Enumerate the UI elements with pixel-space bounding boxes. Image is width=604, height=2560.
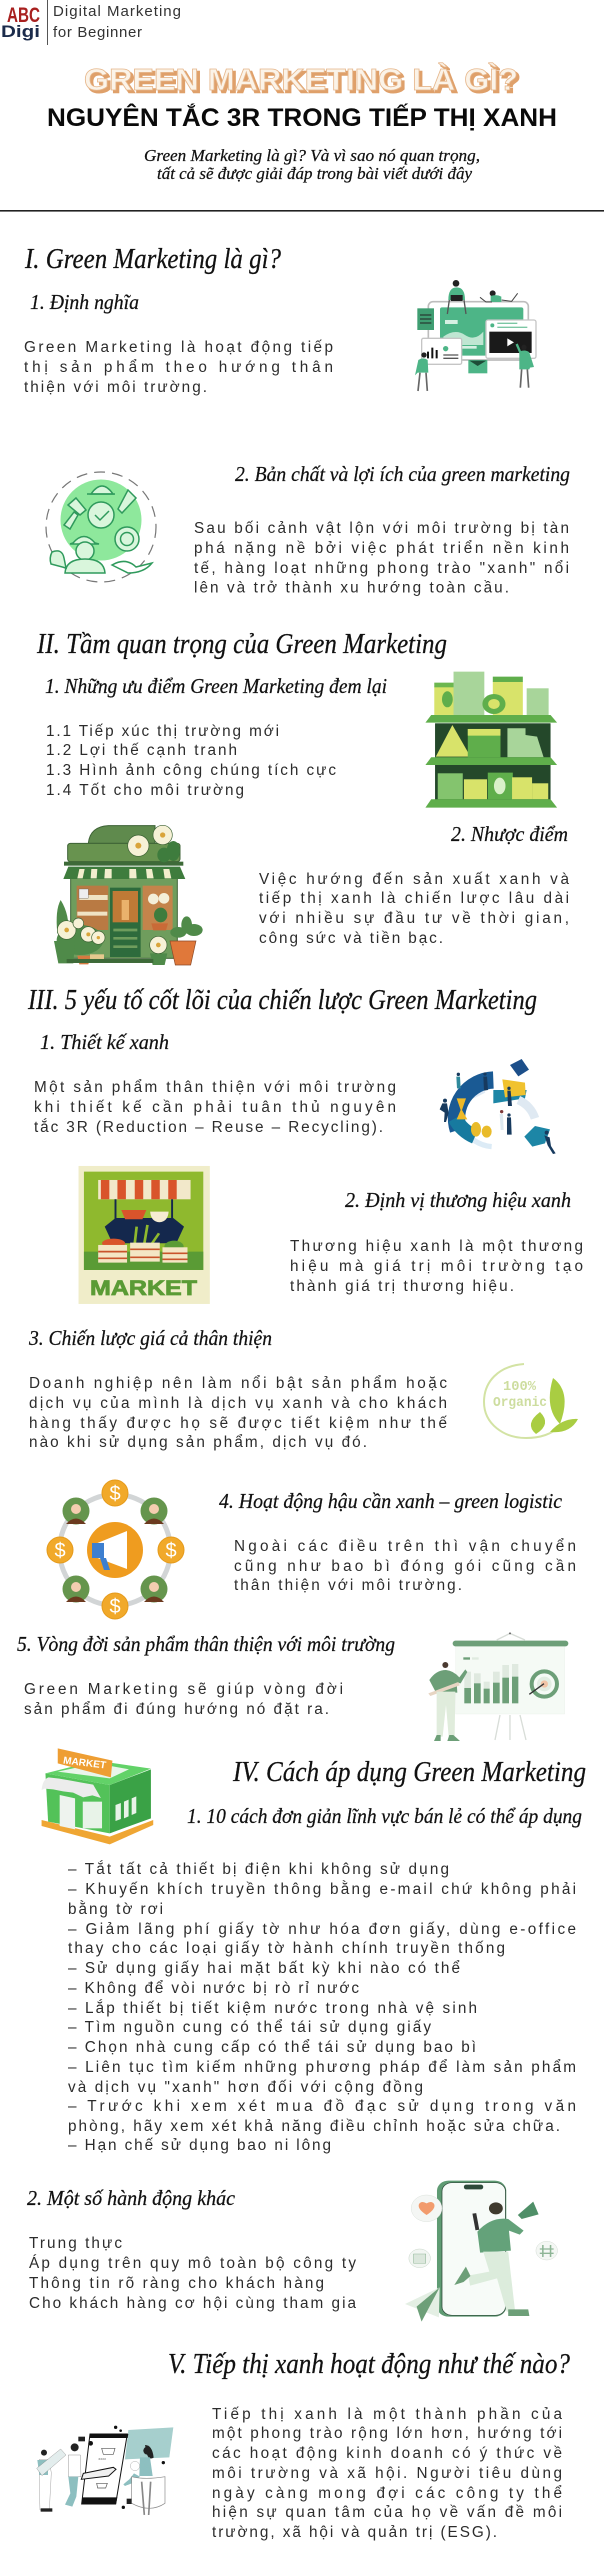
text: bản chất: Sau bối cảnh vật lộn với môi trường bị tàn (194, 520, 569, 537)
subheading: định nghĩa: 1. Định nghĩa (30, 290, 139, 314)
intro text: tất cả sẽ được giải đáp trong bài viết dưới đây (157, 164, 472, 183)
intro text: Green Marketing là gì? Và vì sao nó quan trọng, (144, 146, 480, 165)
text: nhược điểm: tiếp thị xanh là chiến lược lâu dài (259, 890, 569, 907)
subtitle heading: Nguyên tắc 3R: NGUYÊN TẮC 3R TRONG TIẾP THỊ XANH (47, 102, 557, 132)
text: hành động khác (29, 2235, 356, 2312)
text: chiến lược giá: Doanh nghiệp nên làm nổi bật sản phẩm hoặc (29, 1375, 447, 1392)
text: hậu cần xanh: thân thiện với môi trường. (234, 1577, 462, 1594)
text: chiến lược giá (29, 1375, 447, 1451)
title: Green Marketing là gì: GREEN MARKETING LÀ GÌ? (84, 62, 518, 97)
text: section V: một phong trào rộng lớn hơn, hướng tới (212, 2425, 562, 2442)
logo: ABC Digi: Digital Marketing (53, 3, 181, 20)
text: thiết kế xanh: Một sản phẩm thân thiện với môi trường (34, 1079, 396, 1096)
icon: phone with influencer (405, 2181, 557, 2322)
list: 10 cách: – Sử dụng giấy hai mặt bất kỳ khi nào có thể (68, 1960, 460, 1977)
list: 10 cách: – Hạn chế sử dụng bao ni lông (68, 2137, 331, 2154)
text: hành động khác: Áp dụng trên quy mô toàn bộ công ty (29, 2255, 356, 2272)
text: vòng đời sản phẩm: Green Marketing sẽ giúp vòng đời (24, 1681, 343, 1698)
list: ưu điểm: 1.1 Tiếp xúc thị trường mới (46, 723, 279, 740)
heading: section I: I. Green Marketing là gì? (24, 243, 281, 275)
icon: megaphone network: $ (54, 1540, 66, 1562)
text: định vị thương hiệu: hiệu mà giá trị môi trường tạo (290, 1258, 583, 1275)
icon: 3D green market store (42, 1748, 153, 1844)
subheading: định vị thương hiệu: 2. Định vị thương hiệu xanh (345, 1188, 571, 1212)
logo: ABC Digi (1, 0, 181, 45)
text: định vị thương hiệu: Thương hiệu xanh là một thương (290, 1238, 583, 1255)
subheading: hành động khác: 2. Một số hành động khác (27, 2186, 235, 2210)
list: 10 cách: và dịch vụ "xanh" hơn đối với cộng đồng (68, 2079, 423, 2096)
icon: 3D green market store: MARKET (62, 1755, 107, 1771)
text: vòng đời sản phẩm (24, 1681, 343, 1718)
text: định nghĩa: thiện với môi trường. (24, 379, 207, 396)
text: nhược điểm: công sức và tiền bạc. (259, 930, 443, 947)
text: thiết kế xanh: tắc 3R (Reduction – Reuse – Recycling). (34, 1119, 383, 1136)
icon: 100% organic badge: Organic (493, 1395, 547, 1411)
text: bản chất (194, 520, 569, 596)
icon: digital marketing team (415, 280, 536, 391)
text: section V: Tiếp thị xanh là một thành phần của (212, 2406, 562, 2423)
logo: ABC Digi: ABC (7, 4, 40, 27)
icon: online shopping team: ₫₫₫₫ (98, 2458, 106, 2462)
list: 10 cách: – Trước khi xem xét mua đồ đạc sử dụng trong văn (68, 2098, 576, 2115)
list: 10 cách: – Khuyến khích truyền thông bằng e-mail chứ không phải (68, 1881, 576, 1898)
subheading: bản chất: 2. Bản chất và lợi ích của green marketing (235, 462, 570, 486)
text: section V (212, 2406, 562, 2541)
text: section V: trường, xã hội và quản trị (ESG). (212, 2524, 497, 2541)
subheading: hậu cần xanh: 4. Hoạt động hậu cần xanh – green logistic (219, 1489, 562, 1513)
text: bản chất: phá nặng nề bởi việc phát triển nền kinh (194, 540, 569, 557)
icon: megaphone network (47, 1480, 184, 1619)
list: 10 cách: – Chọn nhà cung cấp có thể tái sử dụng bao bì (68, 2039, 476, 2056)
subheading: nhược điểm: 2. Nhược điểm (451, 822, 568, 846)
icon: megaphone network: $ (109, 1596, 121, 1618)
icon: green product shelf (425, 672, 557, 808)
text: nhược điểm: với nhiều sự đầu tư về thời gian, (259, 910, 569, 927)
logo: ABC Digi: for Beginner (53, 24, 142, 41)
text: chiến lược giá: nào khi sử dụng sản phẩm, dịch vụ đó. (29, 1434, 367, 1451)
icon: presenter with chart board (428, 1632, 568, 1741)
text: vòng đời sản phẩm: sản phẩm đi đúng hướng nó đặt ra. (24, 1701, 329, 1718)
text: bản chất: tế, hàng loạt những phong trào "xanh" nổi (194, 560, 569, 577)
list: 10 cách: – Tìm nguồn cung có thể tái sử dụng giấy (68, 2019, 431, 2036)
icon: isometric team with arc (440, 1059, 556, 1154)
text: định nghĩa: Green Marketing là hoạt động tiếp (24, 339, 333, 356)
text: thiết kế xanh (34, 1079, 396, 1136)
text: hành động khác: Cho khách hàng cơ hội cùng tham gia (29, 2295, 356, 2312)
text: hành động khác: Trung thực (29, 2235, 122, 2252)
title: Green Marketing là gì: GREEN MARKETING LÀ GÌ? (86, 64, 520, 100)
text: bản chất: lên và trở thành xu hướng toàn cầu. (194, 580, 509, 596)
text: định nghĩa: thị sản phẩm theo hướng thân (24, 359, 333, 376)
list: ưu điểm (46, 723, 336, 799)
icon: flower shop (54, 825, 203, 965)
text: section V: các hoạt động kinh doanh có ý thức về (212, 2445, 562, 2462)
text: nhược điểm: Việc hướng đến sản xuất xanh và (259, 871, 569, 888)
text: hậu cần xanh: cũng như bao bì đóng gói cũng cần (234, 1558, 576, 1575)
text: nhược điểm (259, 871, 569, 947)
list: 10 cách: phòng, hãy xem xét khả năng điều chỉnh hoặc sửa chữa. (68, 2118, 560, 2135)
list: ưu điểm: 1.2 Lợi thế cạnh tranh (46, 742, 237, 759)
logo: ABC Digi: Digi (1, 22, 40, 41)
icon: 100% organic badge (484, 1364, 578, 1438)
text: chiến lược giá: dịch vụ của mình là dịch vụ xanh và cho khách (29, 1395, 447, 1412)
subheading: thiết kế xanh: 1. Thiết kế xanh (40, 1030, 169, 1054)
list: 10 cách: – Không để vòi nước bị rò rỉ nước (68, 1980, 359, 1997)
list: 10 cách: thay cho các loại giấy tờ hành chính truyền thống (68, 1940, 505, 1957)
text: hành động khác: Thông tin rõ ràng cho khách hàng (29, 2275, 324, 2292)
text: section V: ngày càng mong đợi các công ty thể (212, 2485, 562, 2502)
icon: 100% organic badge: 100% (503, 1379, 537, 1395)
market label: MARKET (90, 1277, 197, 1300)
text: hậu cần xanh (234, 1538, 576, 1594)
subheading: chiến lược giá: 3. Chiến lược giá cả thân thiện (28, 1326, 272, 1350)
subheading: vòng đời sản phẩm: 5. Vòng đời sản phẩm thân thiện với môi trường (17, 1632, 395, 1656)
list: 10 cách: bằng tờ rơi (68, 1901, 163, 1918)
icon: online shopping team (37, 2426, 173, 2515)
list: 10 cách: – Giảm lãng phí giấy tờ như hóa đơn giấy, dùng e-office (68, 1921, 576, 1938)
text: định nghĩa (24, 339, 333, 396)
text: định vị thương hiệu: thành giá trị thương hiệu. (290, 1278, 514, 1295)
list: ưu điểm: 1.3 Hình ảnh công chúng tích cực (46, 762, 336, 779)
icon: megaphone network: $ (109, 1483, 121, 1505)
list: 10 cách (68, 1861, 576, 2154)
list: 10 cách: – Liên tục tìm kiếm những phương pháp để làm sản phẩm (68, 2059, 576, 2076)
icon: workers and hands circle (46, 472, 156, 582)
subheading: ưu điểm: 1. Những ưu điểm Green Marketing đem lại (45, 674, 387, 698)
text: section V: môi trường và xã hội. Người tiêu dùng (212, 2465, 562, 2482)
icon: market poster (79, 1166, 210, 1304)
list: 10 cách: – Lắp thiết bị tiết kiệm nước trong nhà vệ sinh (68, 2000, 477, 2017)
icon: megaphone network: $ (165, 1540, 177, 1562)
text: định vị thương hiệu (290, 1238, 583, 1295)
text: chiến lược giá: hàng thấy được họ sẽ được tiết kiệm như thế (29, 1415, 447, 1432)
list: 10 cách: – Tắt tất cả thiết bị điện khi không sử dụng (68, 1861, 449, 1878)
heading: section II: II. Tầm quan trọng của Green Marketing (36, 628, 447, 660)
text: hậu cần xanh: Ngoài các điều trên thì vận chuyển (234, 1538, 576, 1555)
list: ưu điểm: 1.4 Tốt cho môi trường (46, 782, 244, 799)
text: section V: hiện sự quan tâm của họ về vấn đề môi (212, 2504, 562, 2521)
text: thiết kế xanh: khi thiết kế cần phải tuân thủ nguyên (34, 1099, 396, 1116)
intro text (144, 146, 480, 183)
